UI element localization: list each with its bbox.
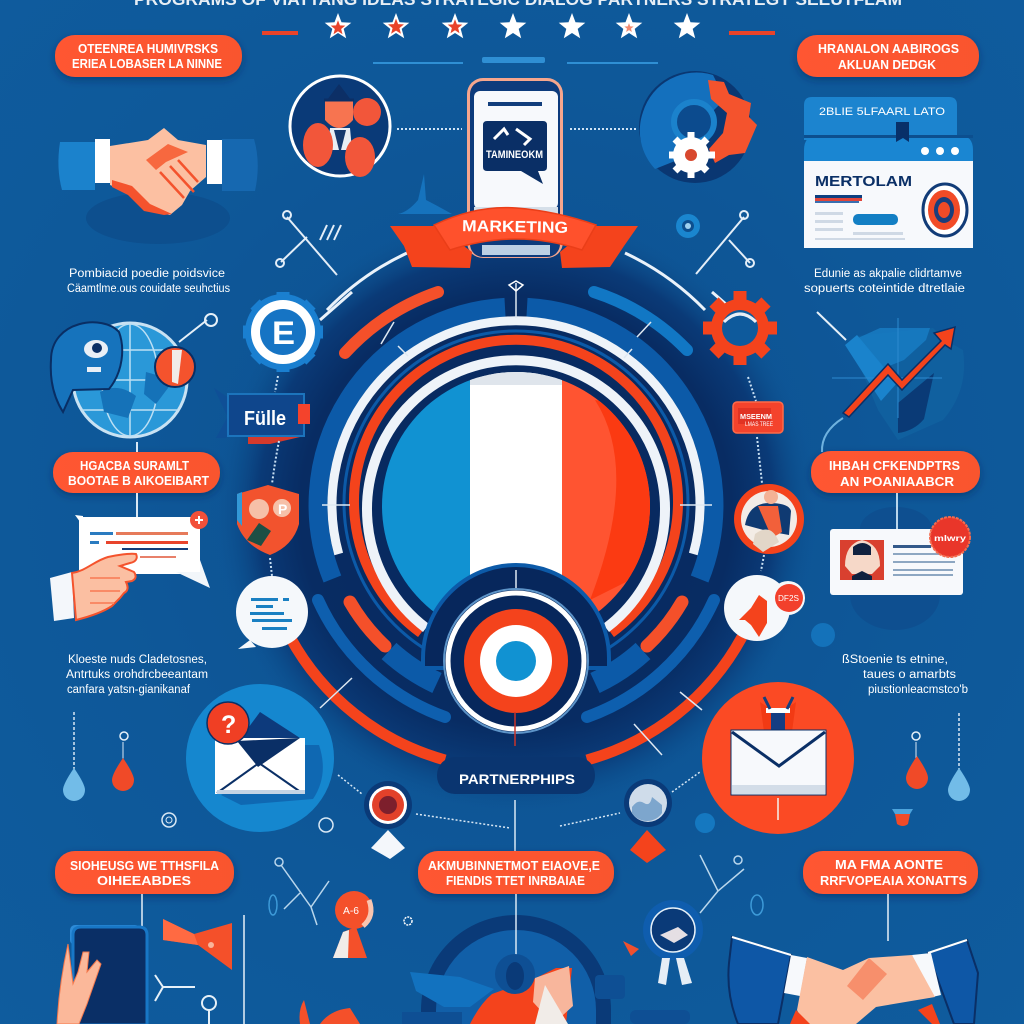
icon: bubble with cross and badge: DF2S [778, 594, 799, 603]
text: middle right caption: piustionleacmstco'b [868, 684, 968, 696]
callout: top left: OTEENREA HUMIVRSKS [78, 41, 218, 56]
small decorative marks [162, 809, 913, 833]
icon: medal right [624, 779, 672, 863]
callout: bottom center [418, 851, 614, 894]
callout: middle right: AN POANIAABCR [840, 474, 955, 489]
text: middle right caption: taues o amarbts [863, 669, 956, 681]
icon: drops left [63, 712, 134, 801]
red ring [354, 340, 678, 633]
callout: bottom right [803, 851, 978, 894]
icon: red tag [733, 402, 783, 433]
callout: bottom left: OIHEEABDES [97, 873, 191, 888]
icon: gear E: E [272, 315, 295, 351]
icon: browser card: 2BLIE 5LFAARL LATO [819, 106, 946, 118]
connector: center line [514, 800, 516, 851]
icon: award medal [623, 900, 703, 985]
flag circle [382, 372, 650, 612]
text: top right caption [804, 268, 965, 295]
arch behind target [423, 565, 609, 668]
text: middle right caption: ßStoenie ts etnine, [842, 654, 948, 666]
ribbon: marketing [390, 208, 638, 268]
text: middle right caption [842, 654, 968, 696]
connector: dotted lines [397, 128, 638, 130]
connectors: bottom lines [142, 894, 888, 1024]
connectors: lower dotted lines [338, 772, 700, 828]
icon: megaphone [163, 919, 232, 970]
icon: phone and hand bottom left [57, 925, 147, 1024]
outer blue ring [318, 307, 714, 579]
icon: bottom center hub [300, 894, 690, 1024]
thin blue ring [344, 331, 688, 675]
text: top right caption: sopuerts coteintide dtretlaie [804, 283, 965, 295]
upper accent arcs [345, 292, 687, 353]
icon: red tag: LMAS TREE [745, 422, 773, 428]
callout: bottom left [55, 851, 234, 894]
text: middle left caption: canfara yatsn-gianikanaf [67, 684, 191, 696]
central hub [236, 246, 796, 794]
icon: browser card: MERTOLAM [815, 173, 912, 190]
text: middle left caption [66, 654, 208, 696]
callout: top left [55, 35, 242, 77]
target [444, 570, 588, 746]
callout: bottom center: AKMUBINNETMOT EIAOVE,E [428, 858, 600, 873]
lower inner arcs [350, 602, 682, 683]
callout: top right: AKLUAN DEDGK [838, 57, 937, 72]
tick marks [320, 283, 712, 755]
callout: middle right [811, 451, 980, 493]
text: top left caption: Cäamtlme.ous couidate seuhctius [67, 283, 230, 295]
text: top left caption: Pombiacid poedie poidsvice [69, 268, 225, 280]
white ring [332, 321, 700, 554]
icon: portrait circle [734, 484, 804, 554]
callout: middle left: HGACBA SURAMLT [80, 458, 189, 473]
callout: top right [797, 35, 979, 77]
icon: red tag: MSEENM [740, 414, 772, 421]
decorative small icons near ribbon [398, 174, 700, 238]
icon: chat card with hand [50, 511, 210, 621]
callout: bottom right: RRFVOPEAIA XONATTS [820, 873, 967, 888]
ribbon: marketing: MARKETING [462, 218, 568, 237]
callout: bottom left: SIOHEUSG WE TTHSFILA [70, 858, 220, 873]
star row [262, 13, 775, 38]
callout: middle left [53, 452, 220, 493]
lower red arcs [290, 637, 742, 760]
label: partnerships [437, 757, 595, 794]
connectors: left dotted path [270, 376, 279, 576]
lower blue arcs [318, 600, 714, 717]
icon: handshake top left [58, 128, 258, 244]
icon: film tag: Fülle [244, 408, 286, 430]
icon: film tag [214, 388, 310, 444]
small symbols bottom left [155, 975, 216, 1024]
icon: globe with head [51, 314, 217, 437]
small blue dot [811, 623, 835, 647]
top accent bars [373, 57, 658, 64]
icon: gear red [703, 291, 777, 365]
label: partnerships: PARTNERPHIPS [459, 771, 575, 787]
icon: person circle [290, 76, 390, 177]
text: top right caption: Edunie as akpalie clidrtamve [814, 268, 962, 280]
connectors: right dotted path [748, 377, 764, 571]
icon: cone badge: A-6 [343, 906, 359, 917]
inner white ring [367, 360, 665, 628]
icon: phone: TAMINEOKM [486, 149, 543, 161]
icon: drops right [906, 713, 970, 801]
connector: left column line [136, 442, 138, 517]
icon: browser card [804, 97, 973, 248]
icon: speech bubble left [236, 576, 308, 649]
icon: envelope left: ? [221, 711, 236, 739]
callout: top right: HRANALON AABIROGS [818, 41, 959, 56]
callout: middle right: IHBAH CFKENDPTRS [829, 458, 960, 473]
callout: middle left: BOOTAE B AIKOEIBART [68, 473, 209, 488]
connecting white arcs [320, 253, 742, 320]
icon: envelope left [186, 684, 334, 832]
callout: bottom right: MA FMA AONTE [835, 857, 943, 872]
icon: growth arrow [817, 312, 964, 452]
crossed lines lower [269, 855, 763, 925]
icon: shield [237, 485, 299, 555]
icon: handshake bottom right [728, 937, 978, 1024]
icon: ID card [830, 493, 970, 630]
icon: cone badge [333, 891, 373, 958]
icon: gear E [243, 292, 323, 372]
icon: medal left [364, 781, 412, 859]
connector: crossed lines [276, 211, 754, 275]
text: middle left caption: Antrtuks orohdrcbeeantam [66, 669, 208, 681]
icon: bubble with cross and badge [724, 575, 805, 641]
callout: top left: ERIEA LOBASER LA NINNE [72, 56, 222, 71]
icon: envelope right [702, 682, 854, 834]
callout: bottom center: FIENDIS TTET INRBAIAE [446, 873, 585, 888]
dark disc [216, 212, 816, 812]
icon: ID card: mlwry [934, 534, 967, 543]
diamond marker [509, 281, 523, 291]
icon: gears circle [639, 71, 757, 183]
icon: phone [467, 78, 563, 258]
icon: shield: P [278, 501, 287, 517]
text: middle left caption: Kloeste nuds Cladetosnes, [68, 654, 207, 666]
text: top left caption [67, 268, 230, 295]
